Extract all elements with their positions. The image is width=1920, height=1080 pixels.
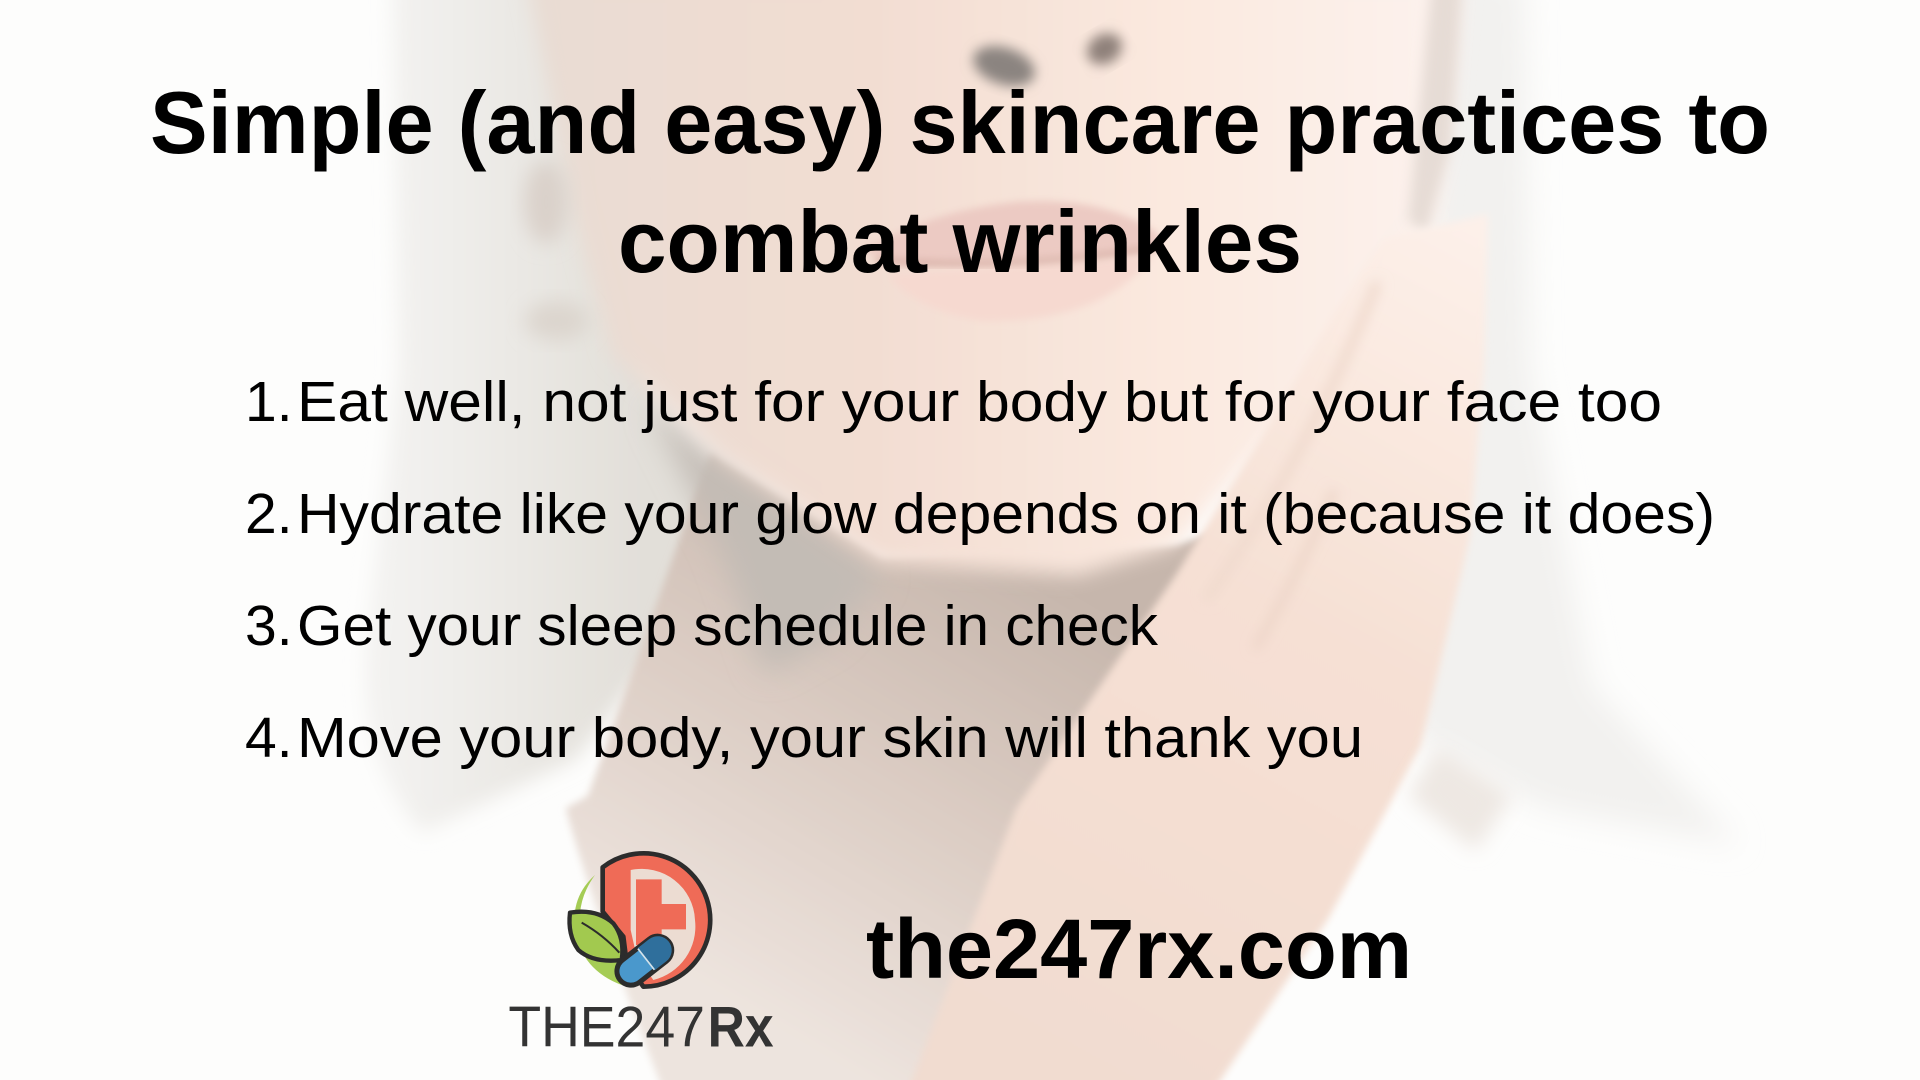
- list item 4: Move your body, your skin will thank you: [297, 706, 1363, 770]
- list item 4: 4.: [245, 706, 293, 770]
- icon: leaf: [569, 912, 622, 961]
- icon: red medical circle: [603, 853, 710, 987]
- list item 3: 3.: [245, 594, 293, 658]
- list item 3: Get your sleep schedule in check: [297, 594, 1159, 658]
- logo wordmark: Rx: [708, 996, 774, 1060]
- list item 2: Hydrate like your glow depends on it (because it does): [297, 482, 1715, 546]
- website url: the247rx.com: [866, 902, 1412, 996]
- icon: green crescent: [574, 875, 627, 985]
- title: [150, 73, 1770, 291]
- title: combat wrinkles: [618, 192, 1302, 291]
- title: Simple (and easy) skincare practices to: [150, 73, 1770, 172]
- logo wordmark: THE247: [508, 996, 705, 1060]
- icon: capsule pill: [611, 931, 677, 991]
- list item 1: Eat well, not just for your body but for your face too: [297, 370, 1662, 434]
- list item 2: 2.: [245, 482, 293, 546]
- list item 1: 1.: [245, 370, 293, 434]
